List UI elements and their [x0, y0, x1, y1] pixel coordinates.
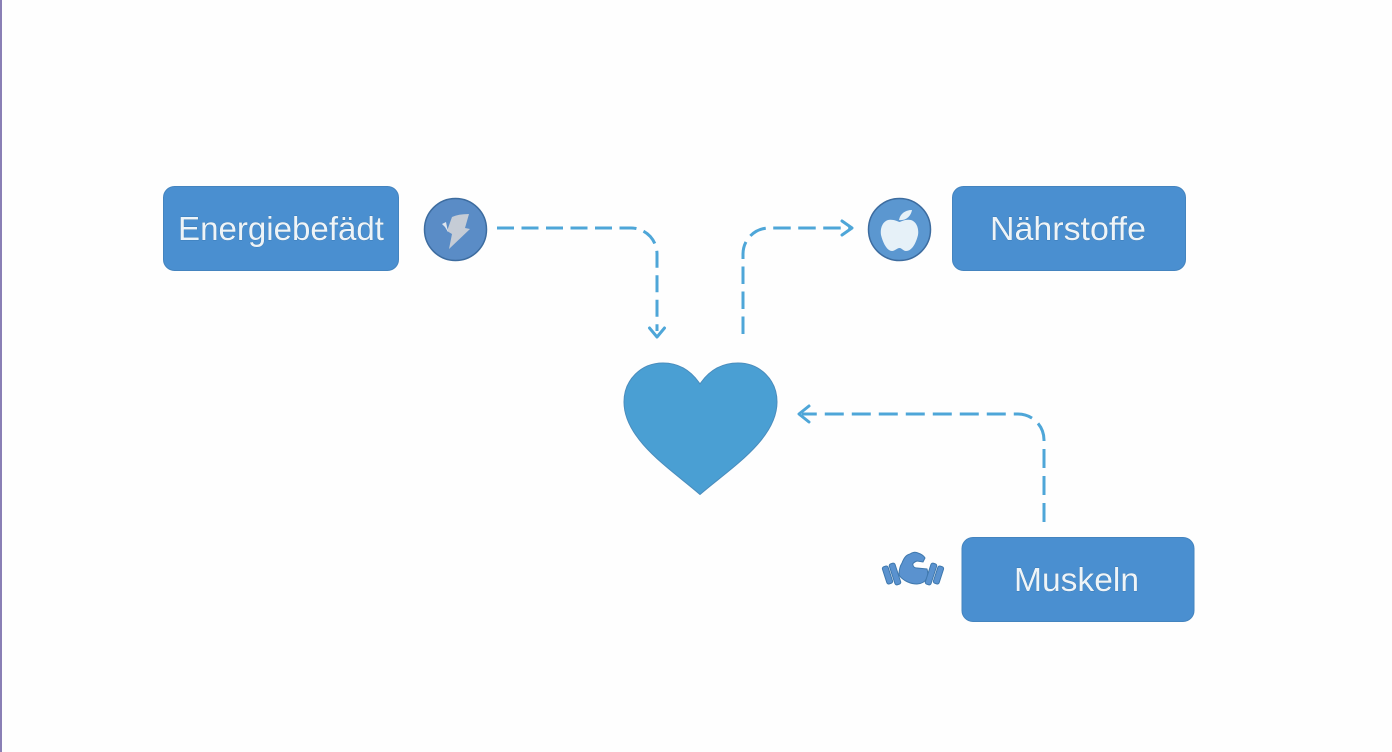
- box: Energiebefädt: [164, 186, 398, 270]
- arrow: heart to apple: [743, 221, 852, 334]
- box: Muskeln: Muskeln: [1014, 561, 1139, 598]
- icon: apple: [868, 198, 930, 260]
- arrow: lightning to heart: [497, 228, 664, 337]
- box: Muskeln: [962, 538, 1194, 622]
- box: Nährstoffe: Nährstoffe: [990, 210, 1146, 247]
- icon: muscle arm with weights: [882, 552, 944, 585]
- arrow: muscles to heart: [799, 406, 1044, 522]
- icon: heart: [624, 363, 777, 494]
- box: Energiebefädt: Energiebefädt: [178, 210, 384, 247]
- left page edge line: [0, 0, 2, 752]
- box: Nährstoffe: [952, 186, 1186, 270]
- icon: lightning bolt: [424, 198, 486, 260]
